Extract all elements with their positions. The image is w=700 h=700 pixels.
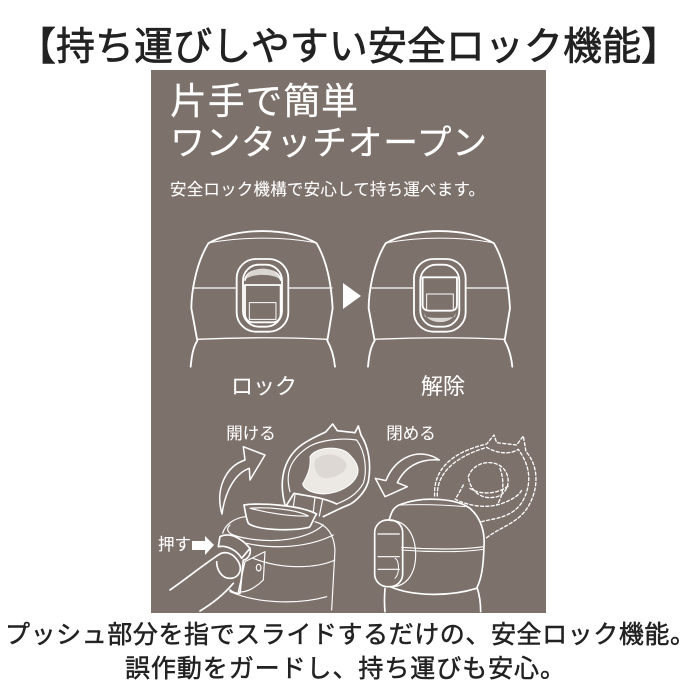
icon: unlocked bottle cap xyxy=(368,231,512,367)
caption xyxy=(5,621,695,683)
illustration: open lid with hand xyxy=(170,424,370,611)
illustration: closed bottle cap xyxy=(375,499,484,612)
title: 【持ち運びしやすい安全ロック機能】 xyxy=(17,26,680,69)
panel heading xyxy=(170,81,487,163)
icon: lid seal xyxy=(303,448,358,494)
label: lock: ロック xyxy=(231,374,297,399)
panel heading: 片手で簡単 xyxy=(170,81,358,122)
arrow: open xyxy=(220,447,265,514)
caption: プッシュ部分を指でスライドするだけの、安全ロック機能。 xyxy=(5,621,695,649)
arrow: lock to unlock xyxy=(343,283,361,309)
panel subheading: 安全ロック機構で安心して持ち運べます。 xyxy=(170,180,485,199)
panel heading: ワンタッチオープン xyxy=(170,124,487,163)
label: release: 解除 xyxy=(421,374,465,399)
icon: locked bottle cap xyxy=(191,231,335,367)
label: push: 押す xyxy=(158,535,191,554)
panel: product background xyxy=(151,70,546,613)
caption: 誤作動をガードし、持ち運びも安心。 xyxy=(125,655,565,683)
arrow: close xyxy=(375,454,439,497)
arrow: push xyxy=(192,536,214,555)
label: close: 閉める xyxy=(386,425,436,443)
label: open: 開ける xyxy=(226,425,276,443)
illustration: dashed lid motion path xyxy=(435,435,536,538)
